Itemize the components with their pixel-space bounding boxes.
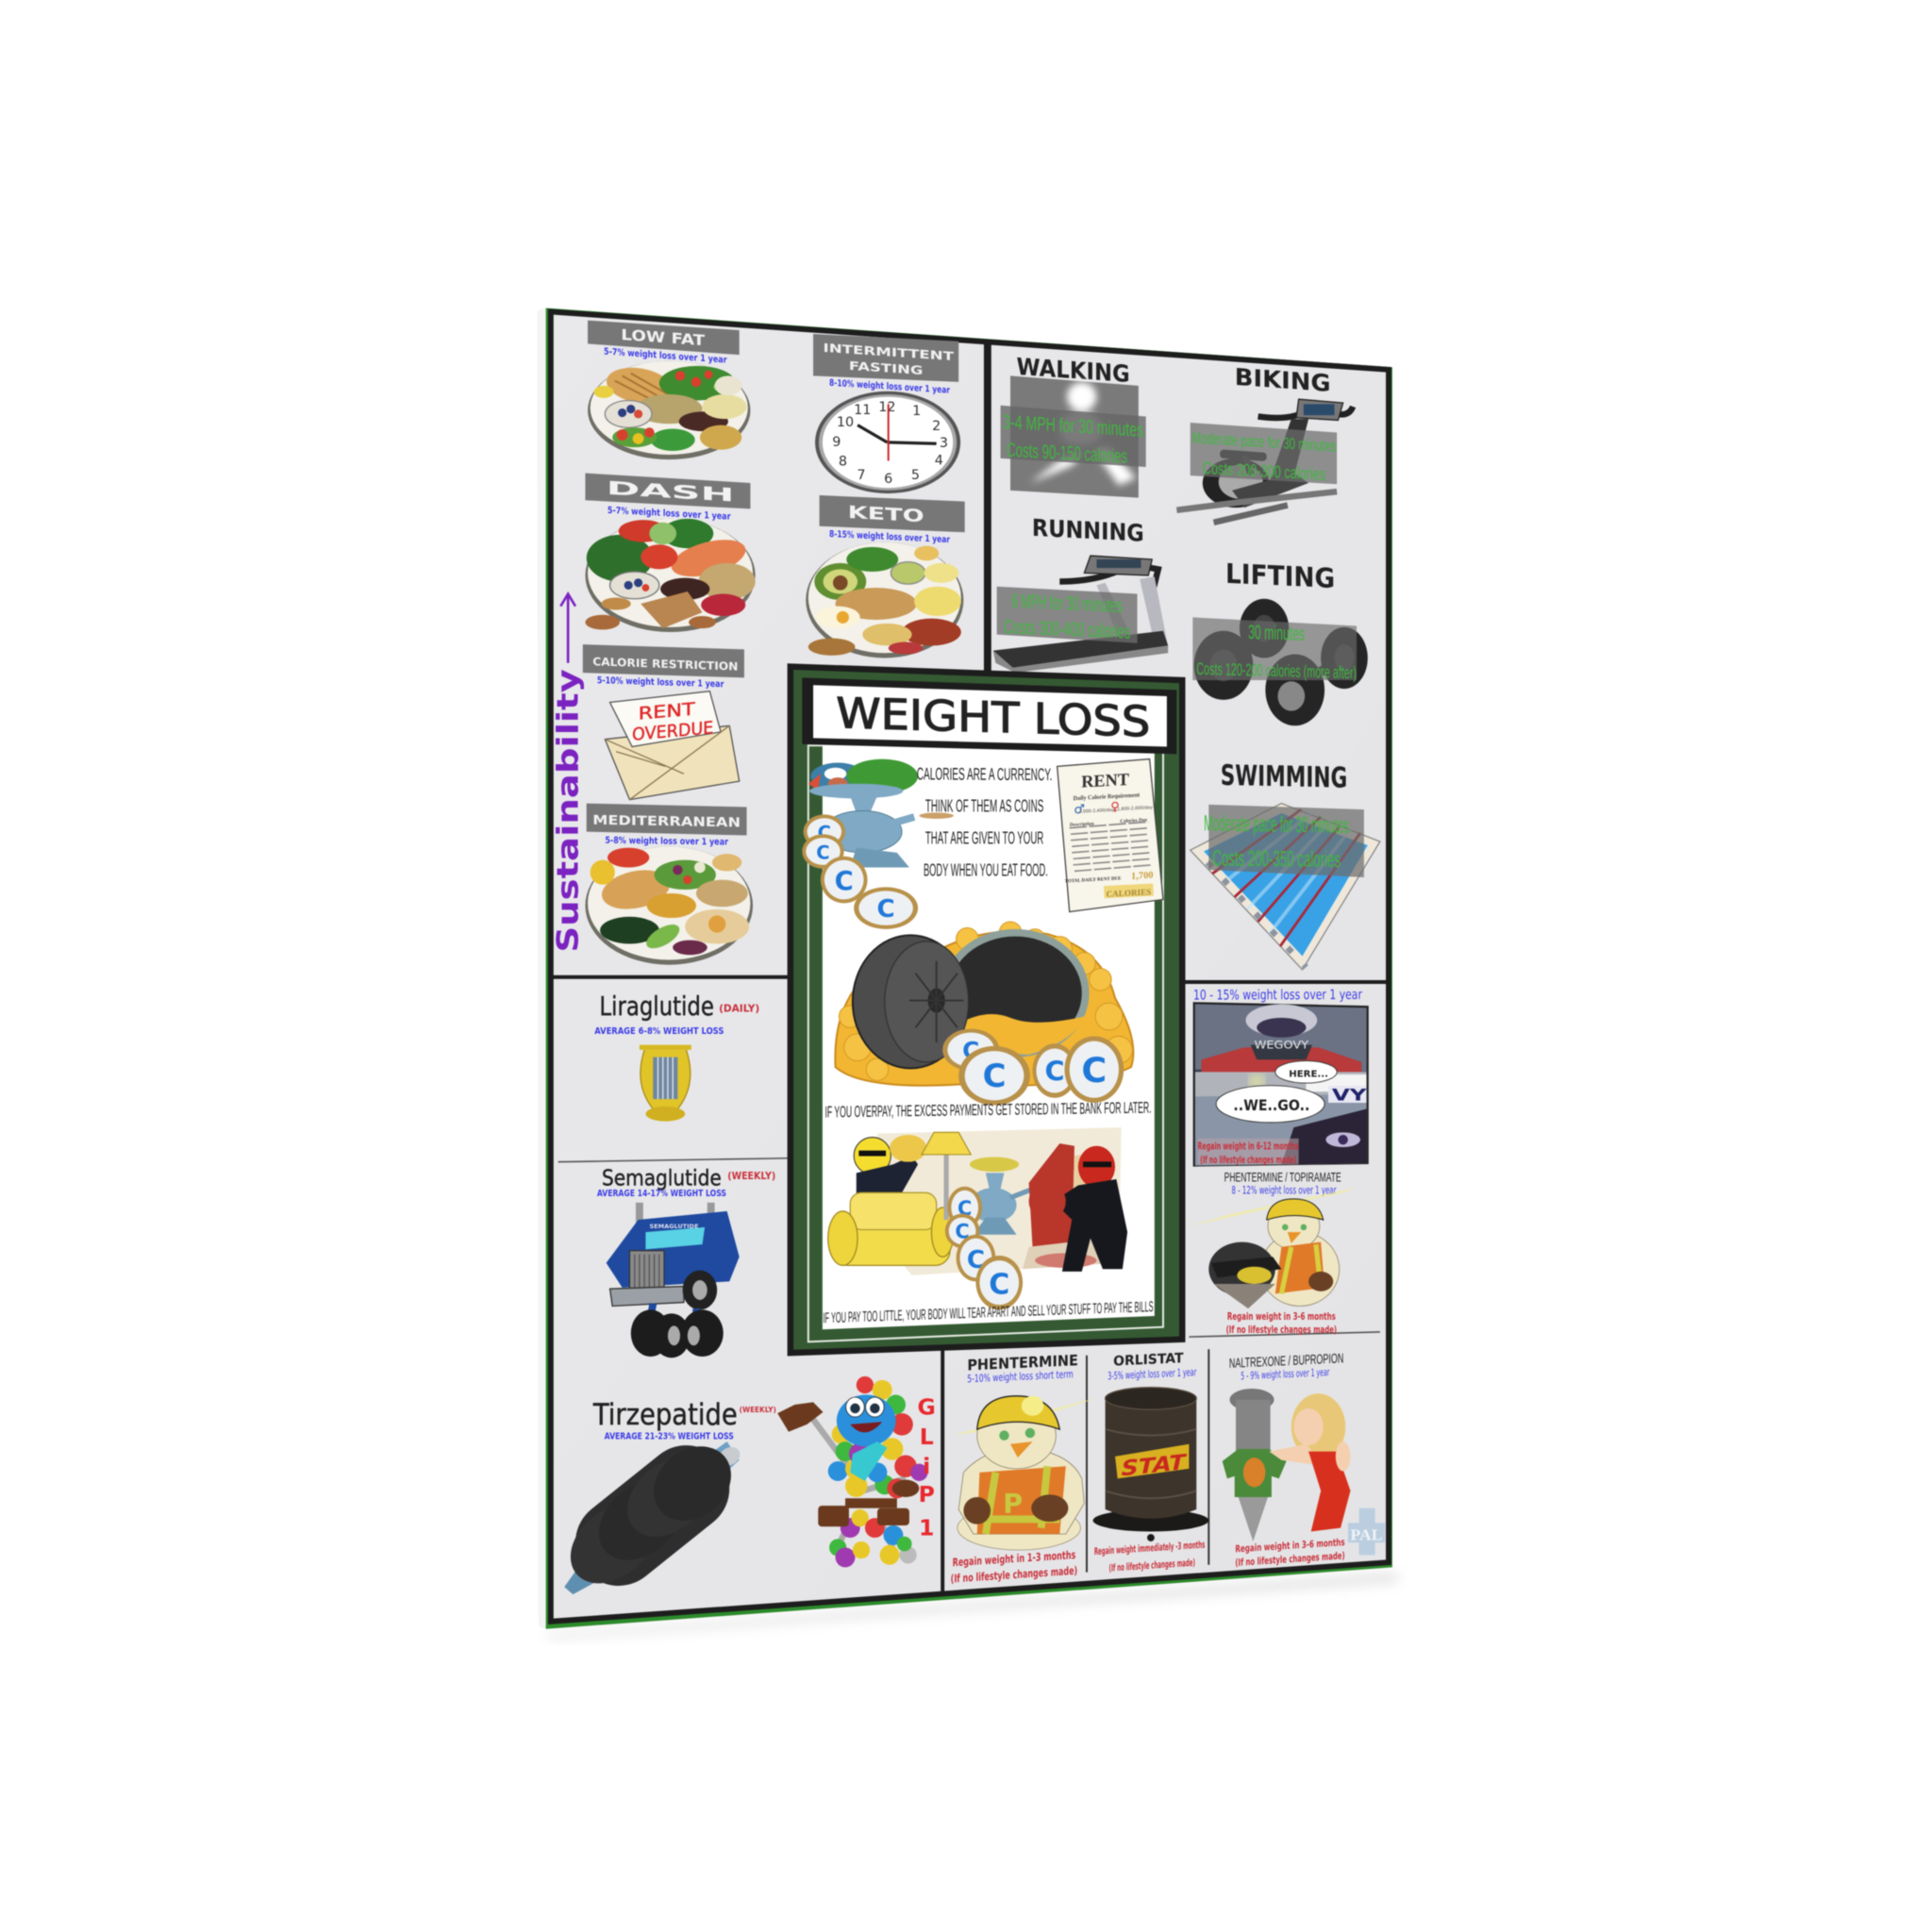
panel: phentermine: (If no lifestyle changes made) [951, 1564, 1077, 1586]
coins: grinder output: C [877, 895, 895, 924]
text: calories are a currency: BODY WHEN YOU EAT FOOD. [924, 860, 1048, 880]
exercise: biking: Costs 200-300 calories [1203, 458, 1325, 484]
panel: orlistat: ORLISTAT [1113, 1351, 1184, 1370]
panel: semaglutide: (WEEKLY) [727, 1171, 775, 1182]
lamp [922, 1132, 971, 1220]
icon: dumbbells [1194, 599, 1368, 725]
panel: semaglutide [597, 1164, 775, 1357]
icon: safety vest bird: P [1003, 1488, 1023, 1520]
icon: treadmill [993, 556, 1168, 673]
rent bill: Calories Due [1120, 817, 1148, 824]
rent bill [1058, 759, 1163, 912]
wall hole [1023, 1143, 1115, 1269]
icon: clock: 8 [839, 455, 847, 470]
illustration: vault full of gold [835, 922, 1133, 1086]
diet: dash: DASH [607, 477, 734, 507]
icon: clock: 7 [857, 468, 866, 483]
icon: clock: 3 [940, 436, 948, 451]
text: GLiP1 vertical [918, 1393, 936, 1541]
coins: grinder output: C [816, 841, 830, 863]
icon: clock: 12 [878, 400, 896, 415]
icon: clock: 11 [854, 403, 871, 418]
panel: naltrexone bupropion: NALTREXONE / BUPROPION [1229, 1351, 1343, 1372]
panel: liraglutide: Liraglutide [599, 992, 714, 1022]
title [802, 677, 1176, 754]
icon: oil barrel [1093, 1388, 1208, 1541]
diet: dash: 5-7% weight loss over 1 year [608, 506, 731, 523]
exercise: walking: WALKING [1017, 353, 1130, 388]
panel: tirzepatide: (WEEKLY) [740, 1406, 776, 1414]
diet: mediterranean: 5-8% weight loss over 1 year [605, 836, 728, 848]
coins: vault: C [983, 1058, 1007, 1095]
panel: phentermine: 5-10% weight loss short term [967, 1368, 1074, 1385]
icon: safety vest bird [951, 1396, 1096, 1550]
exercise: biking [1176, 363, 1353, 523]
exercise: running [993, 514, 1168, 673]
panel: phentermine topiramate: 8 - 12% weight loss over 1 year [1231, 1185, 1337, 1197]
comic panel: VY [1332, 1086, 1368, 1105]
panel: orlistat: (If no lifestyle changes made) [1109, 1557, 1195, 1574]
text: GLiP1 vertical: P [919, 1481, 935, 1507]
rent bill: Description [1070, 821, 1094, 828]
text: calories are a currency: THAT ARE GIVEN TO YOUR [925, 828, 1043, 848]
panel: naltrexone bupropion: (If no lifestyle changes made) [1235, 1550, 1345, 1569]
panel: naltrexone bupropion: Regain weight in 3-6 months [1235, 1537, 1345, 1555]
panel: orlistat: Regain weight immediately -3 months [1094, 1540, 1205, 1557]
exercise: swimming: SWIMMING [1221, 759, 1347, 795]
coins: vault: C [962, 1037, 979, 1064]
red agent [1029, 1146, 1127, 1272]
rent bill: 1,600-2,000/day [1117, 805, 1153, 812]
rent bill: CALORIES [1107, 887, 1151, 899]
icon: oil barrel: STAT [1122, 1450, 1188, 1481]
rent bill: 1,700 [1131, 871, 1154, 882]
icon: clock: 4 [935, 453, 943, 468]
diet: mediterranean: MEDITERRANEAN [592, 813, 741, 830]
text: overpay: IF YOU OVERPAY, THE EXCESS PAYMENTS GET STORED IN THE BANK FOR LATER. [824, 1099, 1152, 1121]
text: GLiP1 vertical: G [918, 1393, 936, 1420]
text: calories are a currency: CALORIES ARE A CURRENCY. [917, 763, 1052, 784]
icon: clock: 9 [832, 435, 841, 450]
icon: clock: 5 [911, 468, 920, 483]
icon: clock: 2 [932, 419, 941, 434]
icon: envelope with rent overdue: OVERDUE [632, 718, 713, 745]
panel: phentermine topiramate: Regain weight in 3-6 months [1227, 1311, 1336, 1323]
rent bill: TOTAL DAILY RENT DUE [1065, 876, 1122, 884]
diet: low fat: 5-7% weight loss over 1 year [604, 347, 727, 366]
icon: tire syringe [555, 1431, 746, 1599]
diet: keto [806, 495, 965, 658]
illustration: body tears apart savings [828, 1127, 1127, 1309]
comic panel: ..WE..GO.. [1233, 1096, 1309, 1114]
exercise: running: 6 MPH for 30 minutes [1011, 591, 1123, 617]
coins: lower grinder: C [955, 1221, 970, 1243]
icon: clock: 10 [837, 415, 854, 430]
exercise: running: Costs 300-400 calories [1004, 616, 1130, 643]
diet: mediterranean [585, 804, 753, 965]
coins: vault: C [1045, 1055, 1065, 1087]
comic panel: WEGOVY [1255, 1039, 1309, 1052]
exercise: lifting: LIFTING [1225, 558, 1335, 594]
panel: exercise [993, 353, 1380, 970]
comic panel [1194, 1003, 1368, 1166]
icon: clock [815, 391, 960, 493]
comic panel: (If no lifestyle changes made) [1200, 1155, 1296, 1166]
diet: low fat [588, 321, 750, 459]
text: calories are a currency: THINK OF THEM AS COINS [925, 796, 1043, 816]
exercise: swimming [1191, 759, 1380, 970]
diet: intermittent fasting [813, 334, 960, 493]
logo: PAL [1348, 1508, 1385, 1555]
panel: phentermine: Regain weight in 1-3 months [953, 1548, 1075, 1569]
diet: intermittent fasting: FASTING [849, 358, 923, 377]
coins: lower grinder: C [989, 1268, 1009, 1301]
text: GLiP1 vertical: 1 [919, 1514, 934, 1541]
panel: naltrexone bupropion [1223, 1351, 1385, 1569]
panel: phentermine topiramate: (If no lifestyle changes made) [1226, 1324, 1337, 1336]
panel: tirzepatide [555, 1376, 936, 1599]
coins: vault [942, 1029, 1124, 1106]
icon: envelope with rent overdue: RENT [639, 699, 696, 724]
diet: keto: KETO [848, 503, 924, 526]
icon: GLP1 pill mascot [777, 1376, 928, 1567]
icon: clock: 6 [884, 472, 892, 487]
panel: phentermine [951, 1351, 1096, 1586]
coins: lower grinder: C [967, 1246, 985, 1274]
icon: bolt character [1223, 1389, 1287, 1541]
rent bill: Daily Calorie Requirement [1074, 791, 1141, 802]
exercise: walking [1001, 353, 1146, 498]
panel: orlistat [1093, 1351, 1208, 1574]
coins: grinder output [802, 814, 918, 929]
exercise: lifting: 30 minutes [1248, 622, 1305, 645]
logo: PAL: PAL [1351, 1526, 1382, 1544]
coins: lower grinder: C [958, 1197, 972, 1220]
icon: blonde woman [1269, 1393, 1351, 1532]
rent bill: ♂ [1074, 803, 1085, 817]
exercise: walking: Costs 90-150 calories [1007, 440, 1127, 468]
exercise: swimming: Costs 200-350 calories [1212, 845, 1341, 872]
panel: phentermine: PHENTERMINE [967, 1351, 1078, 1374]
panel: central weight loss poster: IF YOU PAY TOO LITTLE, YOUR BODY WILL TEAR APART AND SELL YOUR STUFF TO PAY THE BILLS [823, 1299, 1154, 1326]
icon: pool [1191, 804, 1380, 970]
icon: exercise bike [1176, 399, 1353, 523]
text: GLiP1 vertical: i [923, 1453, 930, 1479]
panel: central weight loss poster [791, 667, 1182, 1353]
title: WEIGHT LOSS [836, 690, 1150, 746]
panel: orlistat: 3-5% weight loss over 1 year [1108, 1366, 1196, 1382]
icon: bird and pirate drill [1189, 1188, 1356, 1308]
panel: phentermine topiramate: PHENTERMINE / TOPIRAMATE [1224, 1171, 1341, 1185]
panel: liraglutide: (DAILY) [719, 1003, 759, 1014]
diet: low fat: LOW FAT [621, 325, 705, 349]
rent bill: 2,000-2,400/day [1079, 808, 1115, 815]
icon: envelope with rent overdue [605, 691, 740, 800]
diet: dash [585, 474, 756, 632]
sustainability arrow: Sustainability [552, 669, 586, 953]
panel: tirzepatide: AVERAGE 21-23% WEIGHT LOSS [605, 1432, 734, 1442]
icon: meat grinder with food and coins [808, 759, 954, 868]
exercise: running: RUNNING [1032, 514, 1144, 547]
coins: grinder output: C [835, 867, 854, 896]
panel: phentermine topiramate [1189, 1171, 1356, 1336]
exercise: walking: 3-4 MPH for 30 minutes [1003, 411, 1143, 441]
coins: lower grinder [945, 1187, 1023, 1309]
icon: semaglutide truck [607, 1203, 740, 1357]
panel: semaglutide: Semaglutide [602, 1164, 722, 1191]
text: calories are a currency [917, 763, 1052, 880]
exercise: lifting [1192, 558, 1368, 725]
icon: lyre [640, 1047, 691, 1122]
coins: vault: C [1081, 1050, 1107, 1091]
rent bill: ♀ [1110, 800, 1120, 815]
comic panel: Regain weight in 6-12 months [1198, 1141, 1299, 1153]
panel: tirzepatide: Tirzepatide [592, 1398, 738, 1432]
panel: semaglutide: AVERAGE 14-17% WEIGHT LOSS [597, 1189, 726, 1199]
panel: liraglutide [594, 992, 759, 1122]
diet: calorie restriction: 5-10% weight loss over 1 year [597, 675, 724, 690]
panel: wegovy [1193, 988, 1368, 1166]
diet: calorie restriction: CALORIE RESTRICTION [592, 655, 738, 674]
poster board [537, 308, 1397, 1639]
sustainability arrow [552, 594, 586, 953]
panel: wegovy: 10 - 15% weight loss over 1 year [1193, 988, 1362, 1004]
rent bill: RENT [1081, 770, 1129, 791]
small grinder [970, 1157, 1047, 1235]
icon: clock: 1 [912, 404, 921, 419]
diet: keto: 8-15% weight loss over 1 year [829, 529, 950, 545]
exercise: biking: Moderate pace for 30 minutes [1192, 429, 1336, 456]
diet: intermittent fasting: 8-10% weight loss over 1 year [829, 378, 950, 396]
panel: liraglutide: AVERAGE 6-8% WEIGHT LOSS [594, 1026, 724, 1037]
panel: naltrexone bupropion: 5 - 9% weight loss over 1 year [1241, 1366, 1330, 1382]
text: GLiP1 vertical: L [920, 1424, 934, 1450]
exercise: biking: BIKING [1235, 363, 1331, 397]
yellow agent and couch [828, 1135, 954, 1265]
exercise: swimming: Moderate pace for 30 minutes [1204, 810, 1349, 838]
coins: grinder output: C [818, 822, 831, 843]
diet: intermittent fasting: INTERMITTENT [823, 341, 955, 363]
exercise: lifting: Costs 120-200 calories (more after) [1196, 658, 1357, 682]
panel: diets [552, 321, 965, 965]
diet: calorie restriction [583, 644, 744, 800]
icon: semaglutide truck: SEMAGLUTIDE [649, 1223, 698, 1230]
comic panel: HERE... [1289, 1070, 1328, 1080]
